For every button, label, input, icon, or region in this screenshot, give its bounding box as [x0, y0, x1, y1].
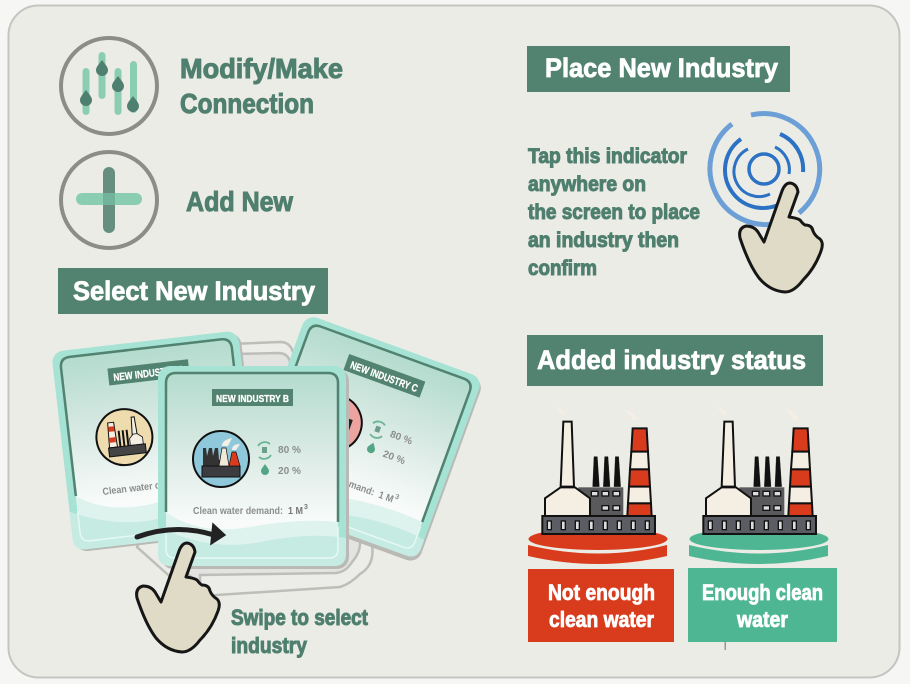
stat: recycled 80%: 80 %	[278, 445, 301, 456]
instruction text	[528, 145, 700, 280]
card: new industry C: NEW INDUSTRY C	[348, 359, 420, 395]
card: new industry C: 80 %	[388, 429, 414, 447]
card: new industry C	[239, 314, 485, 564]
clean water demand: Clean water demand:	[193, 506, 283, 517]
instruction text: the screen to place	[528, 201, 700, 224]
icon: factory	[542, 406, 655, 534]
icon: swipe hand	[137, 543, 219, 652]
heading: select new industry: Select New Industry	[73, 276, 315, 306]
label: enough clean water: water	[736, 607, 788, 632]
card label	[212, 389, 293, 406]
heading: modify/make connection	[180, 53, 343, 119]
card: new industry C: 1 M	[377, 490, 395, 505]
clean water demand: 1 M	[288, 506, 303, 517]
stat: clean 20%: 20 %	[278, 466, 301, 477]
clean water demand: 3	[304, 504, 308, 511]
heading: added industry status	[527, 335, 823, 386]
heading: added industry status: Added industry status	[537, 345, 806, 375]
label: not enough clean water: Not enough	[548, 580, 655, 605]
stat: recycled 80%	[258, 442, 301, 459]
card: new industry C: 20 %	[381, 449, 407, 467]
card: new industry C: Clean water demand:	[288, 457, 376, 499]
instruction text: Tap this indicator	[528, 145, 687, 168]
heading: modify/make connection: Modify/Make	[180, 53, 343, 84]
status: not enough clean water	[528, 406, 674, 642]
card: new industry A: NEW INDUSTRY A	[113, 364, 185, 384]
icon: modify connection	[61, 38, 157, 134]
icon: tap indicator	[710, 114, 820, 225]
heading: place new industry	[527, 46, 790, 92]
heading: select new industry	[58, 268, 328, 314]
caption: swipe: Swipe to select	[231, 605, 369, 630]
card: new industry A	[51, 330, 263, 553]
icon: factory	[703, 406, 816, 534]
label: not enough clean water: clean water	[549, 607, 654, 632]
card: new industry A: Clean water demand:	[102, 477, 193, 498]
heading: add new: Add New	[186, 186, 293, 217]
icon: factory B	[193, 431, 249, 487]
label: not enough clean water	[528, 569, 674, 642]
caption: swipe	[231, 605, 369, 658]
caption: swipe: industry	[231, 633, 308, 658]
heading: place new industry: Place New Industry	[545, 53, 778, 83]
heading: modify/make connection: Connection	[180, 88, 314, 119]
card label: NEW INDUSTRY B	[216, 393, 289, 405]
red platform	[528, 528, 668, 564]
instruction text: anywhere on	[528, 173, 646, 196]
label: enough clean water	[688, 568, 837, 642]
icon: add new	[61, 152, 157, 248]
stat: clean 20%	[261, 464, 301, 477]
status: enough clean water	[688, 406, 837, 642]
label: enough clean water: Enough clean	[702, 580, 823, 605]
stacked back cards	[137, 342, 372, 595]
green platform	[689, 528, 828, 564]
arrow: swipe	[137, 524, 225, 544]
card: new industry C: 3	[394, 493, 400, 501]
icon: tap hand	[740, 183, 822, 292]
instruction text: confirm	[528, 257, 597, 280]
instruction text: an industry then	[528, 229, 679, 252]
card: new industry B	[158, 366, 349, 569]
